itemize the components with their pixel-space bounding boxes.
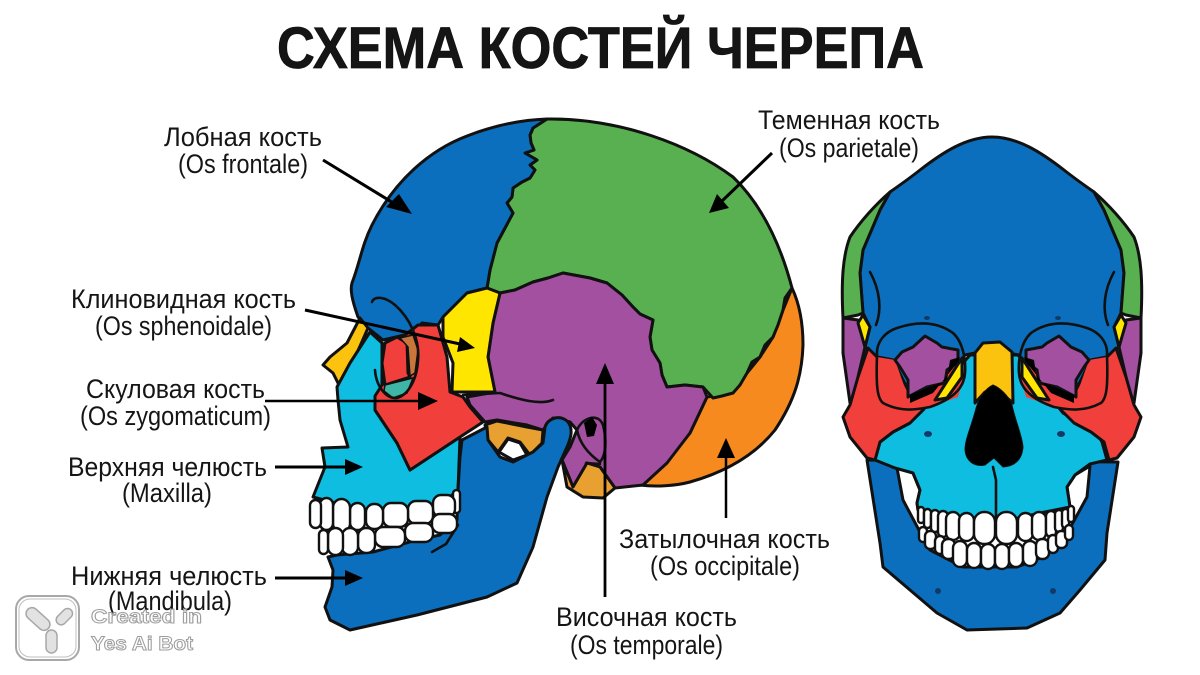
ear canal	[577, 417, 605, 464]
label: mandible: Нижняя челюсть	[71, 561, 267, 591]
frontal bone (blue)	[351, 119, 547, 340]
small foramina	[924, 316, 1065, 594]
zygomatic bone (red)	[375, 325, 483, 470]
temporal bone (purple)	[467, 273, 707, 488]
sphenoid left (yellow)	[858, 315, 870, 347]
cranium dome (blue)	[860, 137, 1124, 410]
title: СХЕМА КОСТЕЙ ЧЕРЕПА	[277, 16, 924, 81]
orbit fill	[382, 337, 410, 385]
label: mandible	[71, 561, 267, 616]
watermark logo	[16, 596, 79, 660]
label: temporal: (Os temporale)	[570, 630, 723, 660]
orbit right black	[1024, 357, 1074, 403]
temple line left	[870, 272, 879, 325]
label: occipital: (Os occipitale)	[650, 551, 800, 581]
label: occipital: Затылочная кость	[619, 524, 830, 554]
temporal line	[463, 393, 553, 402]
nasal bone	[323, 318, 368, 387]
orbit left yellow	[935, 358, 962, 400]
label: sphenoid: (Os sphenoidale)	[95, 311, 272, 341]
arrow: frontal	[323, 160, 412, 214]
parietal right (green)	[1094, 192, 1142, 318]
label: occipital	[619, 524, 830, 581]
orbit left rim	[877, 323, 965, 410]
label: parietal: Теменная кость	[758, 105, 940, 135]
mandible ramus line	[432, 525, 458, 552]
front view skull	[842, 137, 1142, 630]
label: frontal: (Os frontale)	[178, 149, 308, 179]
zygomatic right (red)	[1061, 348, 1141, 460]
label: sphenoid	[71, 284, 296, 341]
label: frontal	[164, 122, 322, 179]
temporal left (purple)	[843, 318, 865, 407]
arrow: occipital	[717, 438, 735, 518]
orbit brown	[400, 335, 418, 376]
label: mandible: (Mandibula)	[108, 586, 232, 616]
orbit right purple	[1026, 336, 1089, 397]
socket opening	[499, 439, 527, 460]
label: zygomatic	[80, 374, 271, 431]
midline suture	[993, 467, 996, 523]
orbit left red	[877, 357, 965, 410]
label: sphenoid: Клиновидная кость	[71, 284, 296, 314]
side view skull	[310, 119, 803, 630]
mastoid (orange)	[562, 460, 615, 498]
orbit outline	[372, 298, 418, 398]
orbit left purple	[895, 336, 958, 397]
label: zygomatic: Скуловая кость	[86, 374, 265, 404]
arrow: parietal	[709, 153, 772, 213]
watermark text: Created in	[91, 607, 202, 628]
lower teeth (side)	[319, 514, 457, 555]
arrow: sphenoid	[305, 310, 475, 352]
orbit right rim	[1019, 323, 1107, 410]
nose opening	[965, 385, 1023, 467]
mouth white gap	[897, 466, 1090, 567]
arrow: mandible	[275, 570, 363, 586]
maxilla (light blue)	[875, 355, 1107, 523]
label: zygomatic: (Os zygomaticum)	[80, 401, 271, 431]
arrow: temporal	[596, 363, 614, 597]
orbit right red	[1019, 357, 1107, 410]
label: temporal	[556, 602, 737, 660]
label: frontal: Лобная кость	[164, 122, 322, 152]
sphenoid right (yellow)	[1114, 315, 1126, 347]
label: maxilla: Верхняя челюсть	[68, 452, 267, 482]
arrows	[265, 153, 772, 597]
label: temporal: Височная кость	[556, 602, 737, 632]
watermark text	[91, 607, 202, 655]
arrow: zygomatic	[265, 392, 438, 410]
upper teeth (side)	[310, 490, 460, 532]
left half bones	[842, 192, 965, 460]
right half bones	[1019, 192, 1142, 460]
orbit teal	[384, 378, 413, 398]
mandible (blue)	[867, 460, 1118, 630]
temporal right (purple)	[1119, 318, 1141, 407]
label: parietal: (Os parietale)	[779, 133, 919, 163]
orbit right yellow	[1022, 358, 1049, 400]
zygomatic left (red)	[843, 348, 923, 460]
sphenoid bone (yellow)	[443, 288, 500, 392]
upper teeth (front)	[918, 506, 1074, 544]
mandible (blue)	[325, 418, 571, 630]
label: parietal	[758, 105, 940, 163]
watermark	[16, 596, 202, 660]
label: maxilla	[68, 452, 267, 508]
orbit left black	[910, 357, 960, 403]
watermark text: Yes Ai Bot	[91, 634, 194, 655]
parietal left (green)	[842, 192, 890, 318]
jaw socket (orange)	[485, 421, 543, 455]
parietal bone (green)	[487, 119, 792, 398]
nasal bones	[975, 342, 1013, 403]
occipital bone (orange)	[640, 288, 803, 486]
maxilla (light blue)	[313, 332, 460, 515]
lower teeth (front)	[919, 525, 1073, 569]
temple line right	[1105, 272, 1114, 325]
label: maxilla: (Maxilla)	[122, 478, 212, 508]
arrow: maxilla	[275, 459, 363, 475]
